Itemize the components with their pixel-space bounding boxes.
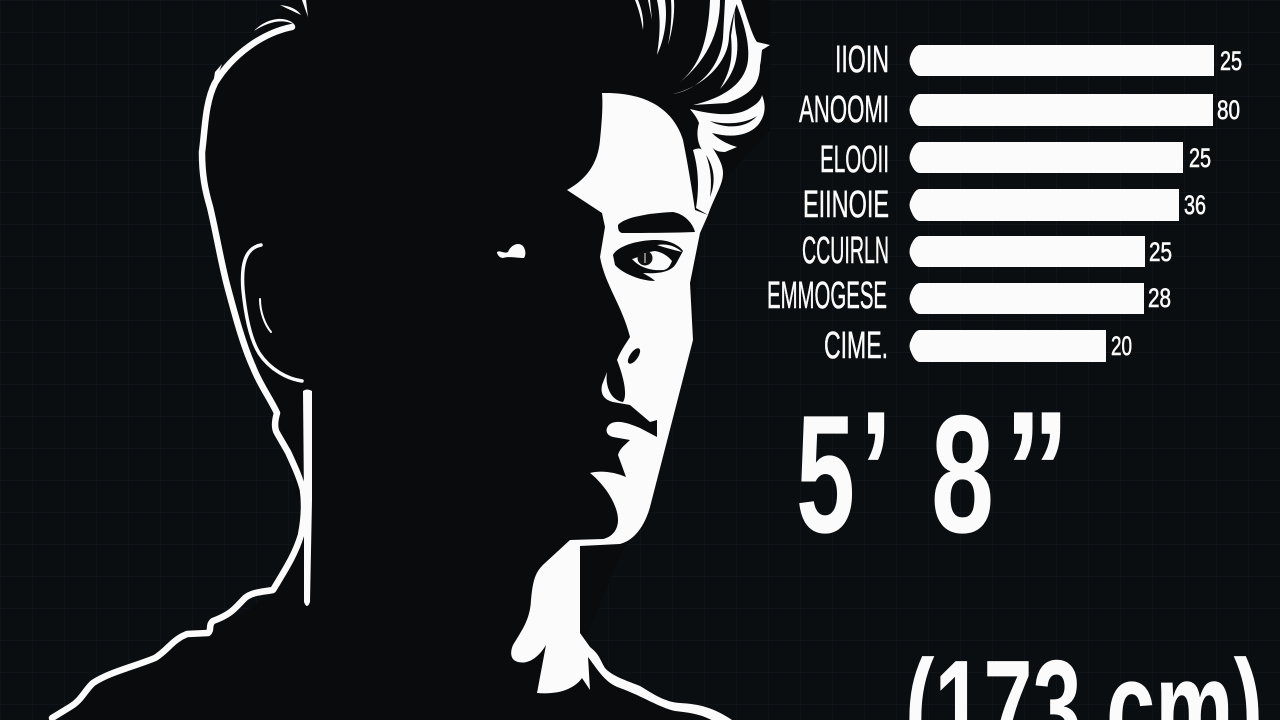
face highlight [511,93,735,720]
bar row 2: 80 [1217,95,1240,125]
bar row 1: IIOIN [835,39,889,81]
bar row 2: ANOOMI [799,89,889,131]
bar row 5 [802,230,1172,272]
cheek mark [497,244,525,258]
bar row 6 [767,275,1171,317]
bar row 7: 20 [1111,331,1132,361]
hair gaps [706,116,757,197]
bar row 3: ELOOII [820,139,889,181]
height in feet and inches: 5 [796,380,855,568]
bar row 6: EMMOGESE [767,275,887,317]
height in feet and inches: 8 [931,380,994,568]
bar row 4 [803,184,1206,226]
bar row 5: 25 [1149,237,1172,267]
hair front strands [635,0,770,215]
hair wisps at crown [212,0,308,90]
bar chart [767,39,1242,367]
bar row 4: 36 [1184,190,1206,220]
bar row 6: 28 [1148,283,1171,313]
bar row 1: 25 [1220,46,1242,76]
portrait silhouette [52,0,770,720]
bar row 7: CIME. [824,325,888,367]
height in feet and inches: ’ [860,376,892,564]
ear [243,245,302,381]
neck line [303,390,312,606]
eyebrow [618,212,695,233]
bar row 2 [799,89,1240,131]
nostril [626,346,642,366]
bar row 7 [824,325,1132,367]
head and shoulder outline [52,27,304,718]
height in feet and inches [796,376,1070,568]
bar row 3: 25 [1189,143,1211,173]
bar row 5: CCUIRLN [802,230,889,272]
silhouette fill [57,0,770,720]
height in feet and inches: ” [1004,376,1070,564]
bar row 4: EIINOIE [803,184,889,226]
bar row 1 [835,39,1242,81]
bar row 3 [820,139,1211,181]
eye [613,240,683,281]
